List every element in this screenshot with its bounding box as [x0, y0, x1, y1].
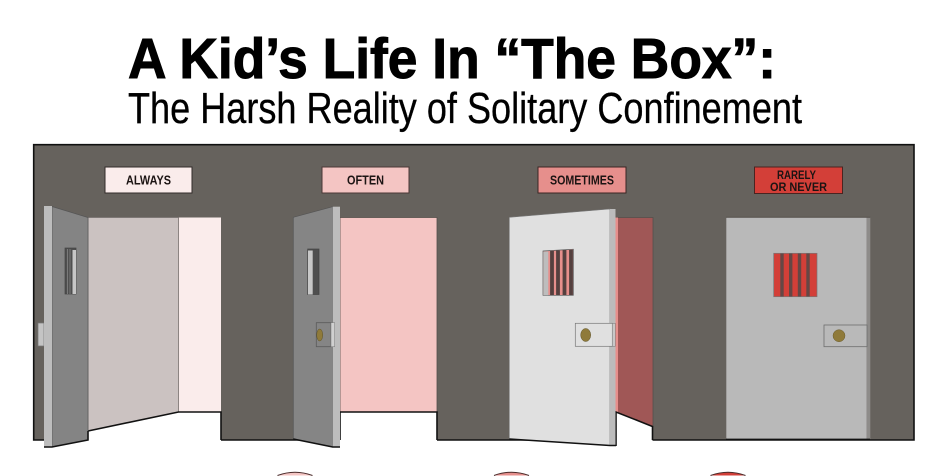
- sign: rarely or never: [754, 167, 842, 194]
- sign: rarely or never: OR NEVER: [770, 180, 827, 194]
- sign: sometimes: SOMETIMES: [550, 174, 614, 188]
- open door: [293, 207, 340, 447]
- sign: always: [105, 167, 192, 193]
- wall: [34, 145, 914, 440]
- sign: sometimes: [538, 167, 626, 193]
- panel: often: [293, 167, 437, 447]
- sign: often: OFTEN: [347, 174, 384, 188]
- open door: [509, 209, 616, 446]
- open door: [38, 206, 88, 447]
- main heading: A Kid’s Life In “The Box”:: [128, 27, 776, 91]
- title block: [128, 27, 802, 133]
- room interior: [340, 218, 437, 441]
- circle: rarely or never: [710, 472, 746, 476]
- room interior: [610, 218, 653, 446]
- sign: often: [322, 167, 409, 193]
- sign: always: ALWAYS: [126, 174, 171, 188]
- panel: rarely or never: [726, 167, 870, 439]
- panel: always: [38, 167, 221, 447]
- circle: sometimes: [494, 472, 529, 476]
- sign: rarely or never: RARELY: [777, 168, 816, 182]
- closed door: [726, 217, 870, 439]
- panel: sometimes: [509, 167, 653, 446]
- room interior: [50, 218, 221, 441]
- subtitle: The Harsh Reality of Solitary Confinement: [128, 84, 802, 133]
- cut-off circles row: [278, 472, 746, 476]
- circle: often: [278, 472, 312, 476]
